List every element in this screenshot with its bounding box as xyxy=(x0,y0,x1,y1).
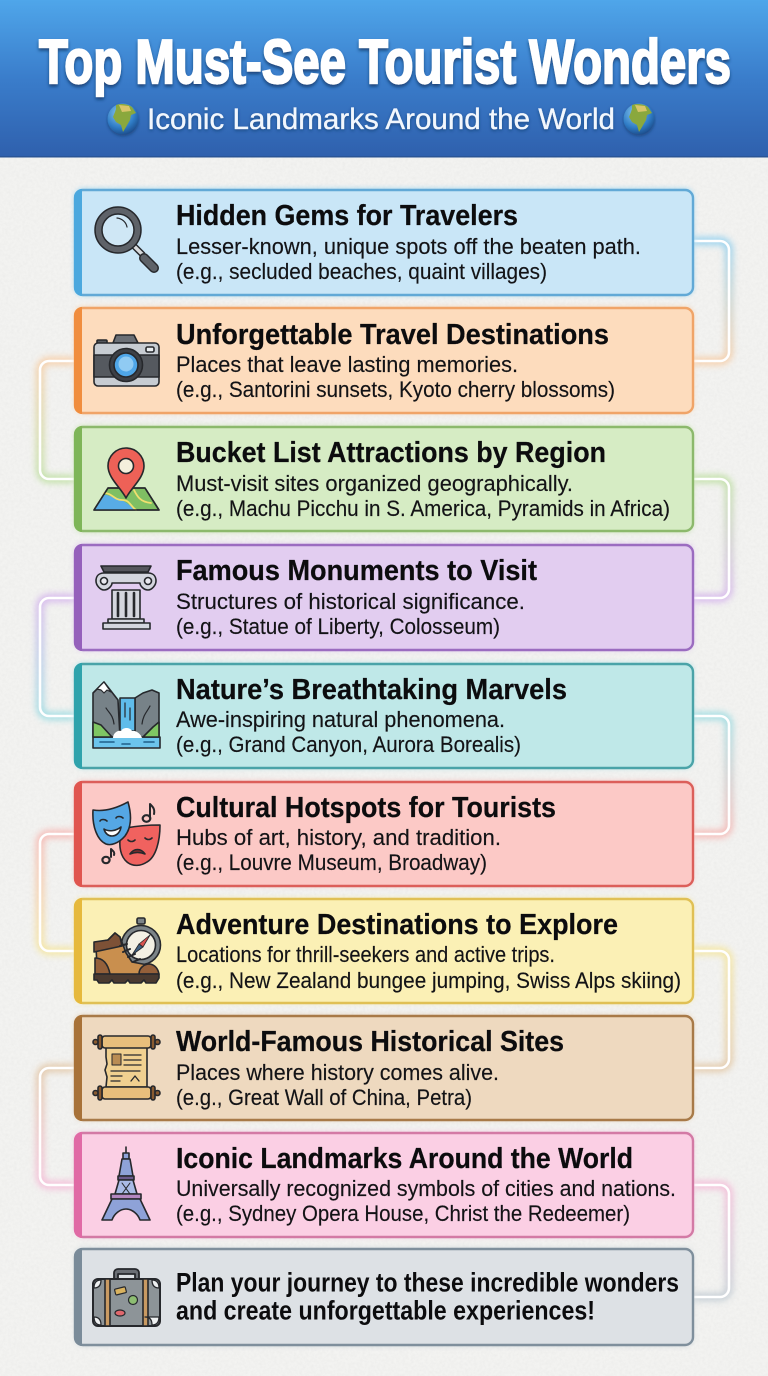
example: (e.g., New Zealand bungee jumping, Swiss Alps skiing) xyxy=(176,968,681,993)
subtitle: Iconic Landmarks Around the World xyxy=(147,103,615,136)
connector: card 2 to card 3 xyxy=(40,361,74,479)
closing message: and create unforgettable experiences! xyxy=(176,1296,595,1326)
closing message: Plan your journey to these incredible wonders xyxy=(176,1268,679,1298)
heading: Cultural Hotspots for Tourists xyxy=(176,792,556,824)
icon: boot and compass xyxy=(94,918,160,983)
panel: call to action xyxy=(74,1247,694,1347)
heading: Adventure Destinations to Explore xyxy=(176,909,618,941)
icon: column xyxy=(96,566,156,629)
heading: Unforgettable Travel Destinations xyxy=(176,319,609,351)
example: (e.g., Machu Picchu in S. America, Pyramids in Africa) xyxy=(176,496,670,521)
example: (e.g., Grand Canyon, Aurora Borealis) xyxy=(176,732,521,757)
heading: Nature’s Breathtaking Marvels xyxy=(176,674,567,706)
connector: card 1 to card 2 xyxy=(693,241,729,361)
icon: camera xyxy=(94,335,159,386)
heading: Hidden Gems for Travelers xyxy=(176,200,518,232)
description: Places where history comes alive. xyxy=(176,1060,499,1085)
header banner xyxy=(0,0,768,158)
description: Locations for thrill-seekers and active trips. xyxy=(176,942,555,967)
connector: card 8 to card 9 xyxy=(40,1068,74,1185)
connector: card 4 to card 5 xyxy=(40,598,74,716)
icon: left globe xyxy=(108,104,138,134)
connector: card 6 to card 7 xyxy=(40,834,74,951)
description: Hubs of art, history, and tradition. xyxy=(176,825,501,850)
example: (e.g., Great Wall of China, Petra) xyxy=(176,1085,472,1110)
heading: World-Famous Historical Sites xyxy=(176,1026,564,1058)
example: (e.g., Statue of Liberty, Colosseum) xyxy=(176,614,500,639)
panel: iconic landmarks xyxy=(74,1131,694,1238)
heading: Famous Monuments to Visit xyxy=(176,555,537,587)
description: Places that leave lasting memories. xyxy=(176,352,518,377)
panel: nature marvels xyxy=(74,662,694,769)
description: Awe-inspiring natural phenomena. xyxy=(176,707,505,732)
connector: card 3 to card 4 xyxy=(693,479,729,598)
panel: cultural hotspots xyxy=(74,780,694,887)
panel: adventure destinations xyxy=(74,897,694,1004)
icon: map pin xyxy=(94,448,159,510)
icon: waterfall xyxy=(93,682,160,748)
icon: theatre masks xyxy=(93,802,160,865)
heading: Bucket List Attractions by Region xyxy=(176,437,606,469)
description: Must-visit sites organized geographically. xyxy=(176,471,573,496)
connector: card 7 to card 8 xyxy=(693,951,729,1068)
description: Universally recognized symbols of cities and nations. xyxy=(176,1176,676,1201)
panel: hidden gems xyxy=(74,188,694,296)
panel: historical sites xyxy=(74,1014,694,1121)
description: Lesser-known, unique spots off the beaten path. xyxy=(176,234,641,259)
panel: famous monuments xyxy=(74,543,694,651)
example: (e.g., secluded beaches, quaint villages) xyxy=(176,259,547,284)
panel: unforgettable destinations xyxy=(74,306,694,414)
example: (e.g., Sydney Opera House, Christ the Redeemer) xyxy=(176,1201,630,1226)
icon: eiffel tower xyxy=(102,1147,150,1220)
closing message xyxy=(176,1268,679,1326)
icon: magnifying glass xyxy=(98,210,154,268)
connector: card 5 to card 6 xyxy=(693,716,729,834)
connector: card 9 to card 10 xyxy=(693,1185,729,1297)
panel: bucket list xyxy=(74,425,694,533)
example: (e.g., Louvre Museum, Broadway) xyxy=(176,850,487,875)
icon: scroll xyxy=(93,1035,160,1100)
icon: right globe xyxy=(624,104,654,134)
icon: suitcase xyxy=(93,1269,160,1326)
example: (e.g., Santorini sunsets, Kyoto cherry blossoms) xyxy=(176,377,615,402)
heading: Iconic Landmarks Around the World xyxy=(176,1143,633,1175)
description: Structures of historical significance. xyxy=(176,589,525,614)
